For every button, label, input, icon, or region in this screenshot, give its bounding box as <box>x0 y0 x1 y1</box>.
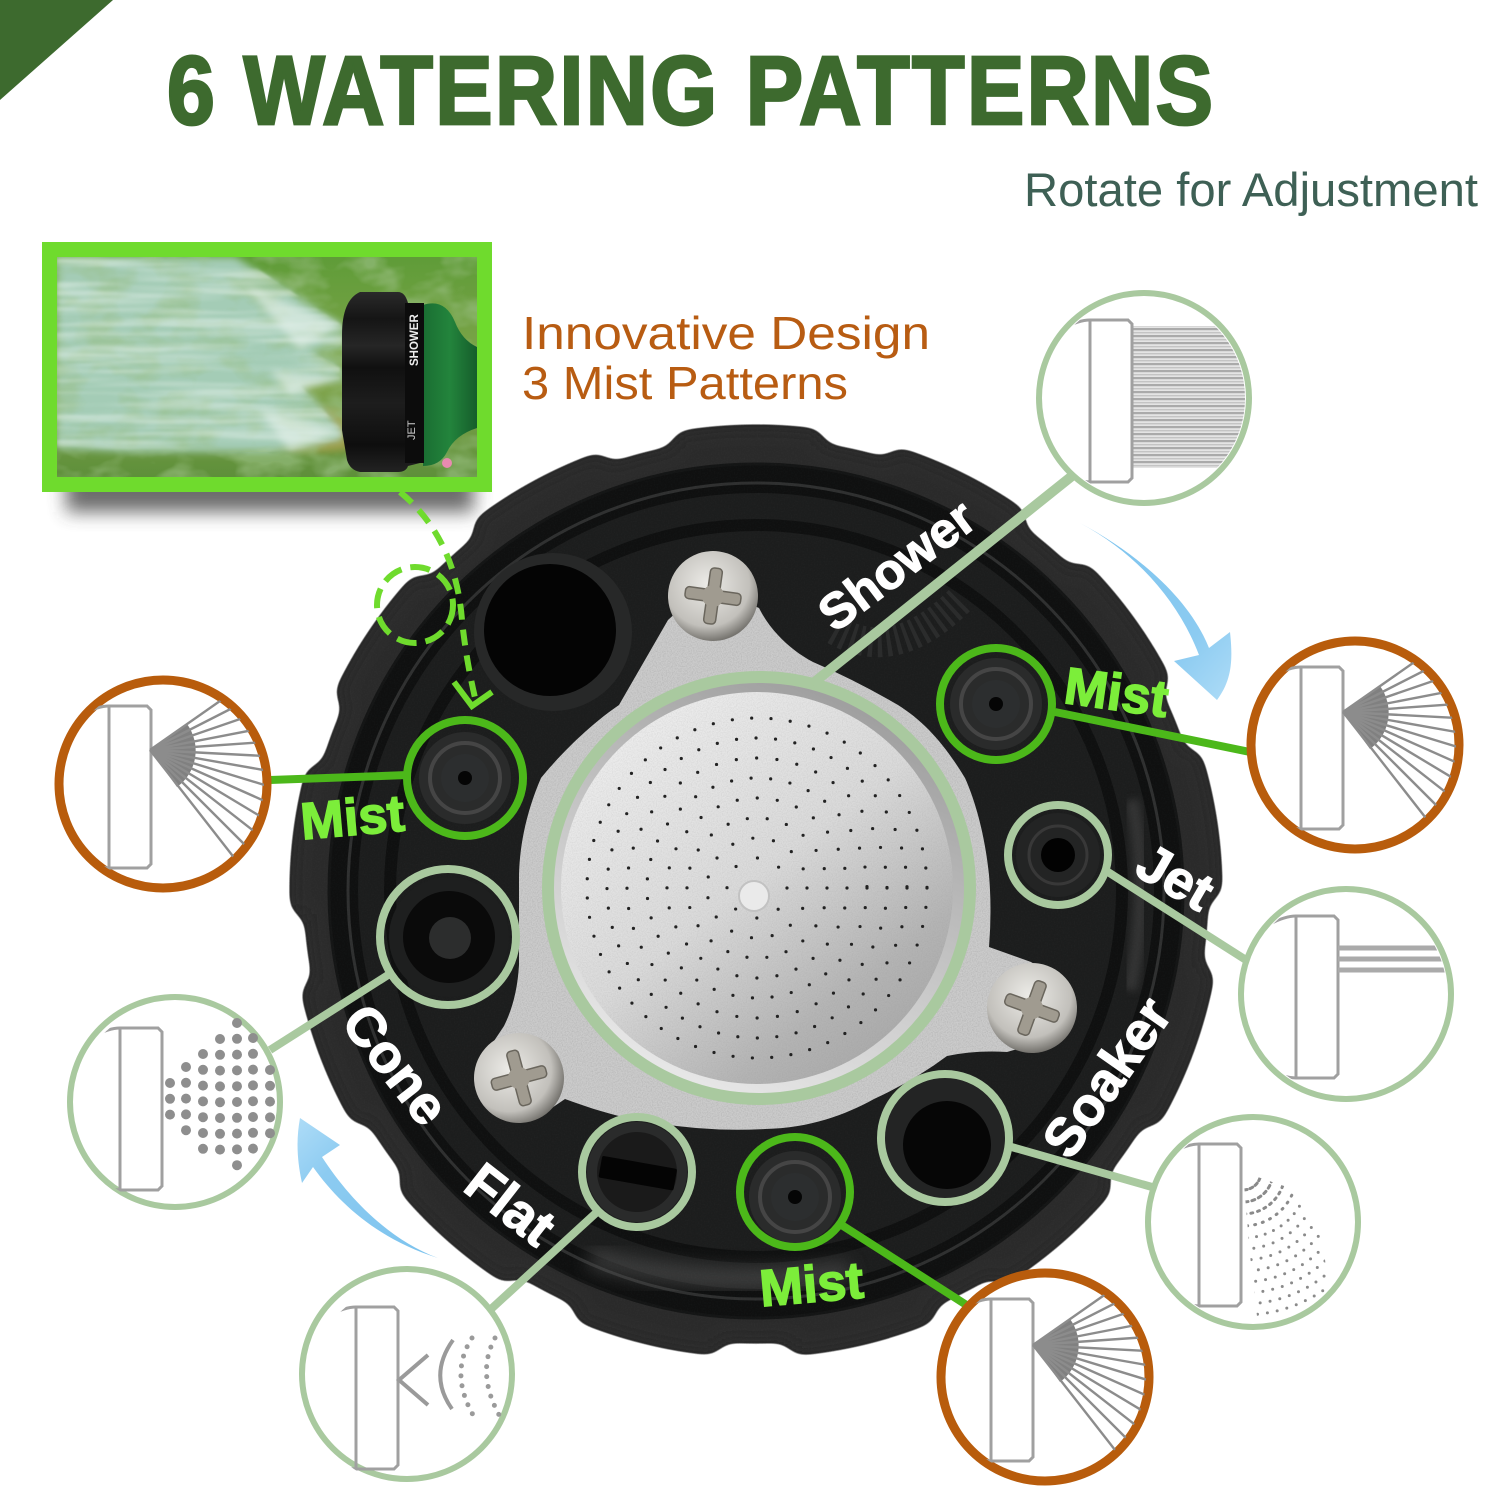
port: cone <box>389 877 509 997</box>
label: Cone: Cone <box>330 993 460 1137</box>
port: mist left <box>419 732 511 824</box>
rotation arrow: left <box>298 1118 438 1258</box>
screw: left <box>464 1023 574 1133</box>
photo shadow <box>66 470 474 512</box>
label: Mist right: Mist <box>1061 657 1172 729</box>
lens: shower <box>1039 293 1252 503</box>
label: Flat: Flat <box>454 1152 566 1258</box>
callout text: Innovative Design <box>522 307 930 359</box>
label: Mist left: Mist <box>298 785 407 851</box>
label: Soaker: Soaker <box>1031 987 1183 1169</box>
title: 6 WATERING PATTERNS <box>167 37 1213 145</box>
corner triangle <box>0 0 113 100</box>
callout text <box>522 307 930 409</box>
lens: mist bottom <box>936 1268 1154 1486</box>
dashed pointer from photo to mist port <box>377 492 492 706</box>
nozzle dial label: jet: JET <box>406 420 418 440</box>
port: soaker <box>885 1078 1005 1198</box>
lens: cone <box>70 997 280 1207</box>
rotation arrow: right <box>1080 523 1231 700</box>
label: Shower: Shower <box>808 489 986 642</box>
plate texture <box>488 600 1052 1130</box>
lens: mist left <box>54 676 272 892</box>
lens: jet <box>1241 889 1451 1099</box>
screw: top <box>662 545 764 647</box>
nozzle head <box>212 347 1300 1435</box>
photo panel: nozzle spraying water <box>42 242 492 492</box>
port: mist bottom <box>749 1151 841 1243</box>
empty port <box>474 553 632 711</box>
connector lines and port rings <box>270 476 1250 1310</box>
lens: mist right <box>1246 636 1464 854</box>
port: jet <box>1016 813 1100 897</box>
embossed mark <box>835 600 960 642</box>
nozzle dial label: shower: SHOWER <box>409 314 421 366</box>
port: mist right <box>950 658 1042 750</box>
lens: soaker <box>1145 1114 1361 1330</box>
lens: flat <box>302 1269 512 1479</box>
label: Jet: Jet <box>1126 832 1224 923</box>
label: Mist bottom: Mist <box>757 1252 866 1318</box>
screw: right <box>974 950 1090 1066</box>
shower disc <box>548 677 970 1099</box>
callout text: 3 Mist Patterns <box>522 357 848 409</box>
metal plate <box>488 600 1052 1130</box>
port: flat <box>587 1122 687 1222</box>
subtitle: Rotate for Adjustment <box>1024 163 1478 216</box>
